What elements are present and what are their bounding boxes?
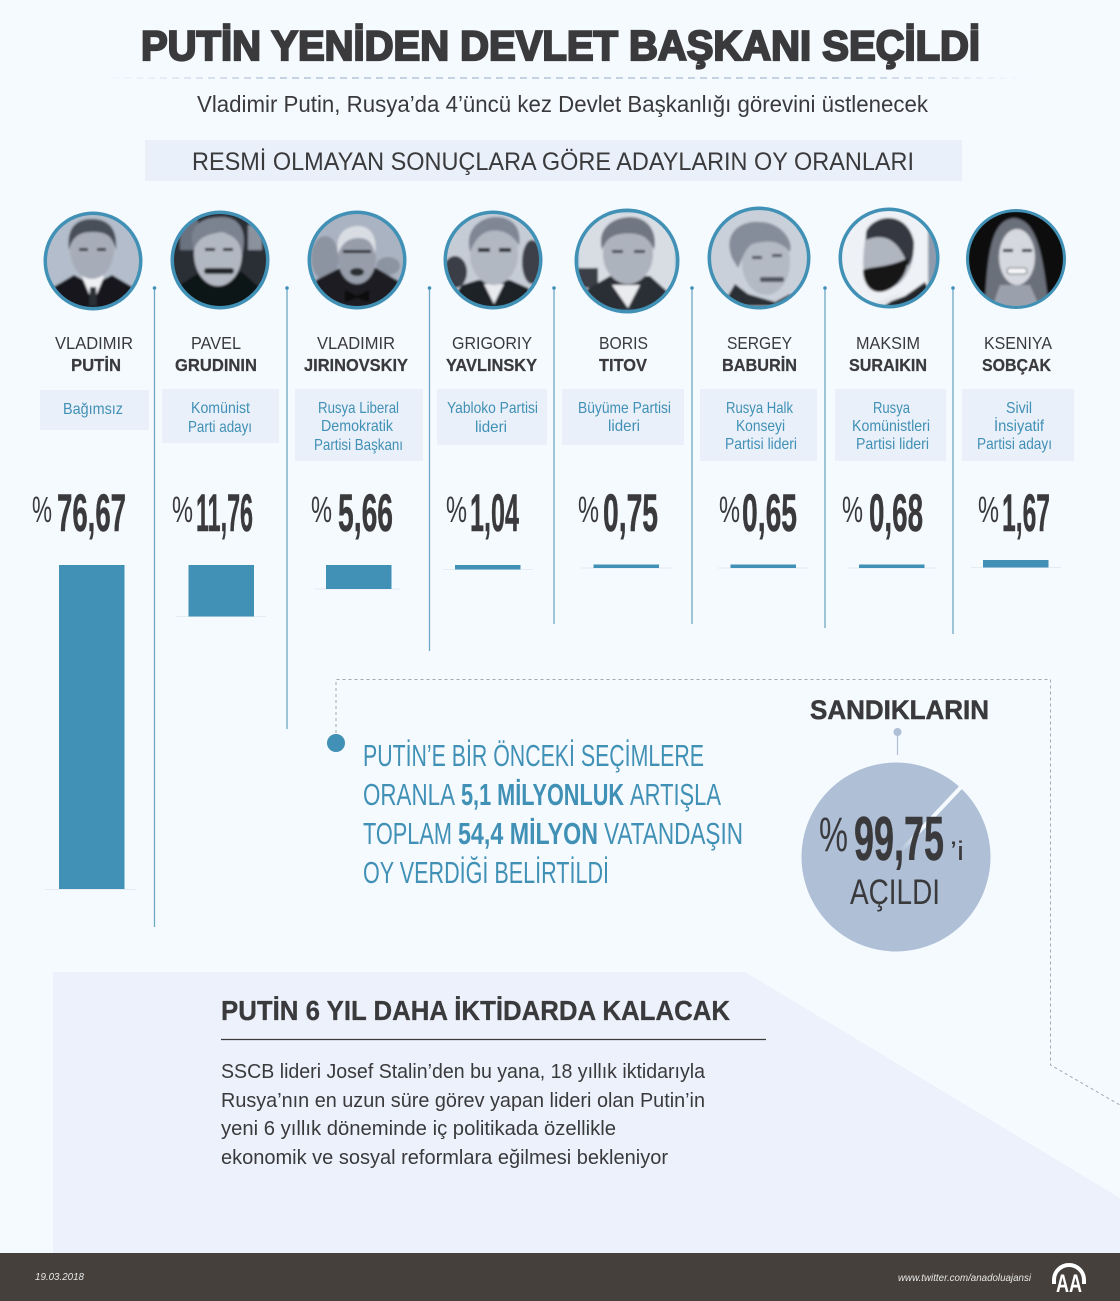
callout line 2: ORANLA (363, 777, 455, 812)
name: Sergey Baburin: BABURİN (722, 355, 797, 375)
summary block (221, 995, 766, 1169)
summary heading: PUTİN 6 YIL DAHA İKTİDARDA KALACAK (221, 995, 730, 1026)
summary body: yeni 6 yıllık döneminde iç politikada özellikle (221, 1118, 616, 1140)
vote share: 11,76 (172, 484, 253, 543)
name: Vladimir Jirinovskiy: VLADIMIR (317, 333, 395, 353)
pie value: % (819, 809, 848, 862)
bottom background panel (53, 972, 1120, 1253)
party tag: Sivil İnsiyatif Partisi adayı: İnsiyatif (994, 416, 1045, 435)
party tag: Yabloko Partisi lideri: Yabloko Partisi (447, 400, 538, 417)
name: Kseniya Sobçak (982, 333, 1052, 375)
portrait: Jirinovskiy (308, 210, 406, 310)
callout line 2: ARTIŞLA (630, 777, 721, 812)
portrait: Sobçak (966, 209, 1066, 309)
icon: Anadolu Agency logo (1054, 1265, 1084, 1298)
candidate: Maksim Suraikin (835, 208, 946, 568)
candidate: Vladimir Putin (32, 212, 149, 890)
name: Boris Titov (599, 333, 648, 375)
name: Sergey Baburin (722, 333, 797, 375)
party tag: Büyüme Partisi lideri: Büyüme Partisi (578, 400, 671, 417)
party tag: Bağımsız: Bağımsız (63, 401, 123, 418)
vote share: 0,75: 0,75 (603, 484, 658, 543)
vote share: 0,65: % (719, 489, 740, 530)
candidate: Grigoriy Yavlinsky: 1,04 (470, 484, 519, 543)
vote share: 76,67: % (32, 489, 52, 530)
party tag: Komünist Parti adayı: Parti adayı (188, 419, 252, 436)
candidate: Vladimir Jirinovskiy (295, 210, 423, 589)
column divider lines (153, 286, 955, 927)
party tag: Bağımsız (40, 390, 149, 430)
party tag: Komünist Parti adayı: Komünist (191, 400, 250, 417)
party tag: Rusya Komünistleri Partisi lideri: Komünistleri (852, 418, 930, 435)
pie label: AÇILDI (850, 873, 940, 912)
portrait: Suraikin (838, 208, 940, 308)
candidate: Grigoriy Yavlinsky (437, 210, 547, 570)
name: Grigoriy Yavlinsky (446, 333, 537, 375)
vote share: 1,04: % (446, 489, 467, 530)
party tag: Rusya Komünistleri Partisi lideri (835, 389, 946, 461)
callout line 3: TOPLAM (363, 816, 452, 851)
name: Vladimir Jirinovskiy (304, 333, 408, 375)
icon: Anadolu Agency logo: AA (1056, 1270, 1082, 1298)
name: Pavel Grudinin (175, 333, 257, 375)
party tag: Büyüme Partisi lideri: lideri (608, 418, 640, 435)
title: PUTİN YENİDEN DEVLET BAŞKANI SEÇİLDİ (141, 22, 980, 69)
portrait: Titov (574, 208, 680, 314)
name: Sergey Baburin: SERGEY (727, 333, 792, 353)
candidate: Kseniya Sobçak (962, 209, 1074, 568)
name: Pavel Grudinin: PAVEL (191, 333, 241, 353)
bar: Baburin (718, 564, 808, 568)
bullet dot (327, 734, 345, 752)
portrait: Yavlinsky (443, 210, 542, 310)
party tag: Rusya Liberal Demokratik Partisi Başkanı: Rusya Liberal (318, 400, 399, 417)
candidate: Pavel Grudinin (162, 210, 279, 616)
vote share: 5,66 (311, 484, 393, 543)
bar: Yavlinsky (443, 565, 533, 570)
vote share: 1,67: % (978, 489, 999, 530)
vote share: 1,67 (978, 484, 1050, 543)
candidate: Boris Titov (562, 208, 684, 568)
party tag: Rusya Halk Konseyi Partisi lideri: Partisi lideri (725, 436, 797, 453)
name: Grigoriy Yavlinsky: YAVLINSKY (446, 355, 537, 375)
bar: Sobçak (971, 560, 1061, 568)
bar: Jirinovskiy (314, 565, 400, 589)
party tag: Rusya Komünistleri Partisi lideri: Partisi lideri (856, 436, 929, 453)
vote share: 0,65 (719, 484, 797, 543)
party tag: Rusya Halk Konseyi Partisi lideri: Konseyi (736, 418, 785, 435)
pie value: 99,75 (854, 805, 944, 874)
vote share: 76,67: 76,67 (57, 484, 126, 543)
vote share: 11,76: % (172, 489, 193, 530)
party tag: Sivil İnsiyatif Partisi adayı: Partisi adayı (977, 436, 1052, 453)
bar: Putin (45, 565, 136, 890)
callout line 2: 5,1 MİLYONLUK (461, 777, 624, 812)
name: Kseniya Sobçak: SOBÇAK (982, 355, 1051, 375)
callout line 3 (363, 816, 743, 851)
vote share: 0,75 (578, 484, 658, 543)
summary body: SSCB lideri Josef Stalin’den bu yana, 18 yıllık iktidarıyla (221, 1061, 706, 1083)
pie value (819, 805, 964, 874)
party tag: Yabloko Partisi lideri (437, 389, 547, 445)
vote share: 0,65: 0,65 (742, 484, 797, 543)
name: Grigoriy Yavlinsky: GRIGORIY (452, 333, 532, 353)
candidate: Sergey Baburin (700, 206, 817, 568)
bar: Grudinin (176, 565, 266, 616)
pin connector (894, 728, 902, 755)
name: Vladimir Jirinovskiy: JIRINOVSKIY (304, 355, 408, 375)
candidate: Kseniya Sobçak: 1,67 (1002, 484, 1050, 543)
callout: turnout statement (327, 734, 743, 890)
pie chart: ballot boxes opened (802, 695, 990, 952)
heading: Sandıkların: SANDIKLARIN (810, 695, 989, 725)
footer bar (0, 1253, 1120, 1301)
name: Kseniya Sobçak: KSENIYA (984, 333, 1052, 353)
callout line 4: OY VERDİĞİ BELİRTİLDİ (363, 855, 609, 890)
vote share: 0,68: 0,68 (869, 484, 923, 543)
portrait: Grudinin (170, 210, 270, 310)
vote share: 0,68 (842, 484, 923, 543)
party tag: Rusya Halk Konseyi Partisi lideri: Rusya Halk (726, 400, 794, 417)
vote share: 0,68: % (842, 489, 863, 530)
party tag: Sivil İnsiyatif Partisi adayı (962, 389, 1074, 461)
name: Vladimir Putin: PUTİN (71, 355, 121, 375)
summary body (221, 1061, 706, 1169)
party tag: Rusya Komünistleri Partisi lideri: Rusya (873, 400, 910, 417)
name: Pavel Grudinin: GRUDININ (175, 355, 257, 375)
portrait: Baburin (708, 206, 810, 310)
vote share: 1,04 (446, 484, 519, 543)
name: Maksim Suraikin: MAKSIM (856, 333, 920, 353)
callout line 1: PUTİN’E BİR ÖNCEKİ SEÇİMLERE (363, 738, 704, 773)
name: Boris Titov: TITOV (599, 355, 647, 375)
name: Vladimir Putin: VLADIMIR (55, 333, 133, 353)
pie disc (802, 762, 990, 952)
section heading band (145, 140, 962, 181)
pie value: ’i (950, 836, 964, 866)
portrait: Putin (44, 212, 142, 310)
summary body: Rusya’nın en uzun süre görev yapan lideri olan Putin’in (221, 1090, 705, 1112)
name: Maksim Suraikin: SURAIKIN (849, 355, 927, 375)
section heading band: RESMİ OLMAYAN SONUÇLARA GÖRE ADAYLARIN OY ORANLARI (192, 147, 914, 176)
candidate: Pavel Grudinin: 11,76 (196, 484, 253, 543)
twitter url: www.twitter.com/anadoluajansi (898, 1272, 1032, 1284)
bar: Titov (581, 564, 671, 568)
party tag: Rusya Liberal Demokratik Partisi Başkanı (295, 389, 423, 461)
party tag: Büyüme Partisi lideri (562, 389, 684, 445)
vote share: 5,66: 5,66 (338, 484, 393, 543)
party tag: Rusya Liberal Demokratik Partisi Başkanı: Partisi Başkanı (314, 437, 403, 454)
vote share: 0,75: % (578, 489, 599, 530)
party tag: Sivil İnsiyatif Partisi adayı: Sivil (1006, 400, 1032, 417)
party tag: Komünist Parti adayı (162, 389, 279, 443)
callout line 2 (363, 777, 721, 812)
party tag: Rusya Halk Konseyi Partisi lideri (700, 389, 817, 461)
subtitle: Vladimir Putin, Rusya’da 4’üncü kez Devlet Başkanlığı görevini üstlenecek (197, 91, 928, 117)
vote share: 5,66: % (311, 489, 332, 530)
party tag: Rusya Liberal Demokratik Partisi Başkanı: Demokratik (321, 418, 394, 435)
callout line 3: 54,4 MİLYON (458, 816, 598, 851)
bar: Suraikin (847, 564, 937, 568)
summary body: ekonomik ve sosyal reformlara eğilmesi bekleniyor (221, 1147, 668, 1169)
callout line 3: VATANDAŞIN (604, 816, 743, 851)
vote share: 76,67 (32, 484, 126, 543)
name: Maksim Suraikin (849, 333, 927, 375)
name: Boris Titov: BORIS (599, 333, 648, 353)
party tag: Yabloko Partisi lideri: lideri (475, 419, 507, 436)
name: Vladimir Putin (55, 333, 133, 375)
date: 19.03.2018 (35, 1272, 84, 1283)
